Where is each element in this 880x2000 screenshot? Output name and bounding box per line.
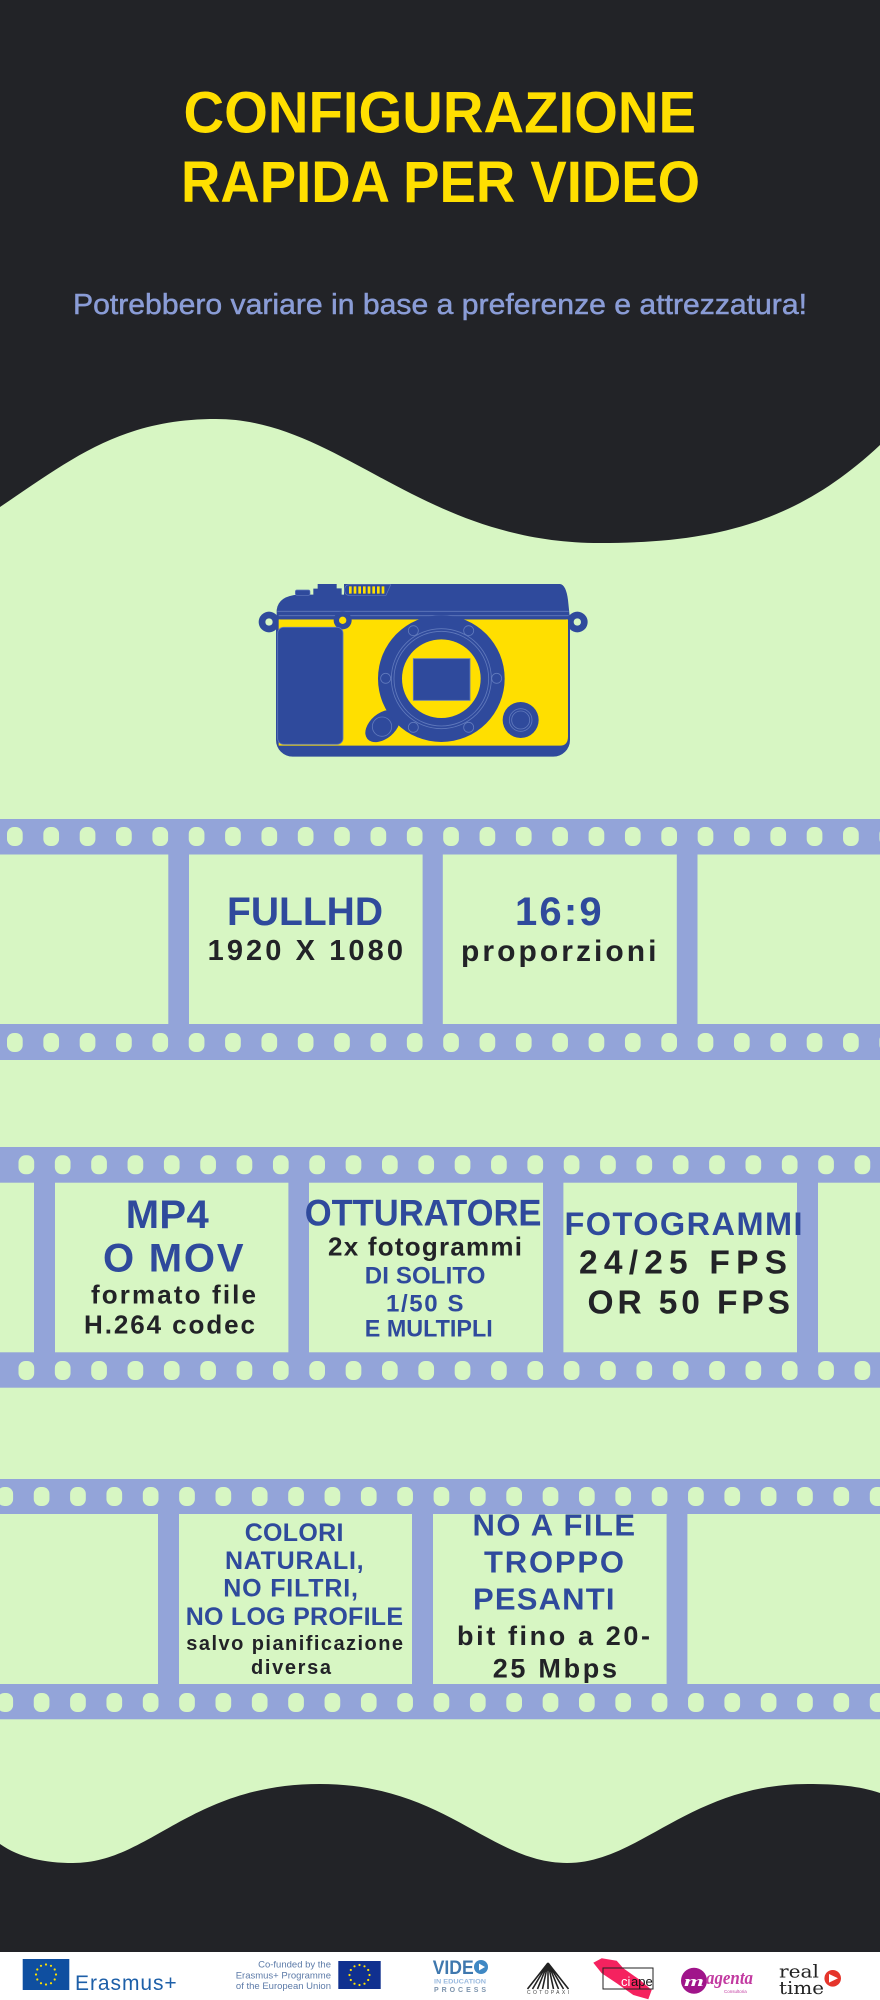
shutter button	[295, 590, 310, 595]
frame text: shutter: OTTURATORE	[305, 1192, 542, 1233]
logo: Magenta: agenta	[706, 1968, 753, 1989]
logo: Ciape: ape	[631, 1974, 653, 1989]
frame text: colours: NATURALI,	[225, 1547, 364, 1575]
footer logo strip	[0, 1952, 880, 2000]
logo: Video in Education Process: IN EDUCATION	[434, 1978, 486, 1986]
frame text: file format: formato file	[91, 1279, 256, 1309]
frame text: frame rate	[564, 1206, 802, 1321]
frame text: shutter: E MULTIPLI	[365, 1316, 493, 1343]
logo: Real Time: real	[779, 1962, 819, 1983]
film band: top	[0, 1147, 880, 1183]
frame text: frame rate: 24/25 FPS	[579, 1244, 787, 1281]
top plate	[277, 584, 570, 619]
logo: Magenta: m	[684, 1974, 704, 1990]
frame text: file format: O MOV	[103, 1236, 244, 1280]
logo: co-funded by the EU: Co-funded by the	[258, 1960, 331, 1971]
film strip 3	[0, 1479, 880, 1719]
logo: Erasmus+	[23, 1959, 177, 1995]
film band: top	[0, 819, 880, 854]
frame text: resolution	[208, 890, 403, 967]
lens release dial	[503, 702, 539, 738]
frame text: bitrate: PESANTI	[473, 1581, 614, 1616]
frame text: file format: H.264 codec	[84, 1310, 255, 1340]
title: CONFIGURAZIONE	[184, 80, 696, 146]
subtitle: Potrebbero variare in base a preferenze e attrezzatura!	[73, 289, 807, 321]
perforations bottom	[7, 1033, 880, 1052]
frame text: bitrate: bit fino a 20-	[457, 1621, 650, 1651]
frame text: colours: diversa	[251, 1657, 332, 1679]
logo: Ciape	[593, 1958, 653, 1999]
film band: bottom	[0, 1352, 880, 1388]
frame text: frame rate: OR 50 FPS	[588, 1284, 790, 1321]
perforations top	[7, 827, 880, 846]
frame text: frame rate: FOTOGRAMMI	[564, 1206, 802, 1242]
strap ring	[334, 611, 352, 629]
perforations top	[0, 1487, 880, 1506]
frame text: file format	[84, 1193, 256, 1340]
title: RAPIDA PER VIDEO	[181, 150, 700, 215]
logo: Cotopaxi	[527, 1963, 569, 1996]
frame text: resolution: 1920 X 1080	[208, 935, 403, 967]
logo: Magenta	[681, 1968, 753, 1994]
film strip 2	[0, 1147, 880, 1388]
frame text: shutter: 1/50 S	[386, 1290, 464, 1317]
frame text: bitrate	[457, 1508, 650, 1683]
camera body	[276, 613, 570, 757]
frame dividers	[168, 854, 698, 1025]
bottom dark wave panel	[0, 1784, 880, 1952]
frame text: aspect ratio	[461, 890, 656, 968]
logo: Video in Education Process: PROCESS	[434, 1987, 486, 1994]
top dark wave panel	[0, 0, 880, 543]
frame text: colours: COLORI	[245, 1519, 343, 1547]
perforations bottom	[18, 1361, 880, 1380]
logo: Real Time	[779, 1962, 841, 1999]
frame dividers	[158, 1514, 687, 1685]
frame text: bitrate: 25 Mbps	[493, 1653, 617, 1683]
frame text: aspect ratio: 16:9	[515, 890, 602, 934]
perforations top	[18, 1155, 880, 1174]
logo: Video in Education Process: VIDE	[433, 1958, 474, 1979]
icon: camera	[259, 584, 588, 757]
logo: co-funded by the EU: of the European Union	[236, 1981, 331, 1992]
title	[181, 80, 700, 215]
film band: bottom	[0, 1684, 880, 1719]
sensor	[413, 659, 470, 700]
frame dividers	[34, 1182, 818, 1353]
logo: Ciape: ci	[621, 1974, 630, 1989]
logo: co-funded by the EU	[236, 1960, 381, 1992]
frame text: bitrate: NO A FILE	[472, 1508, 635, 1543]
frame text: colours: NO LOG PROFILE	[186, 1603, 403, 1631]
film strip 1	[0, 819, 880, 1060]
yellow leather panel	[279, 619, 568, 746]
frame text: colours	[186, 1519, 403, 1679]
release button	[359, 703, 406, 749]
film band: bottom	[0, 1024, 880, 1060]
frame text: shutter: 2x fotogrammi	[328, 1232, 522, 1262]
frame text: shutter: DI SOLITO	[365, 1263, 485, 1290]
frame text: shutter	[305, 1192, 542, 1343]
perforations bottom	[0, 1693, 880, 1712]
top dial knurl	[345, 585, 391, 595]
frame text: colours: salvo pianificazione	[186, 1633, 403, 1655]
film band: top	[0, 1479, 880, 1514]
frame text: aspect ratio: proporzioni	[461, 935, 656, 968]
lens mount	[378, 615, 505, 742]
frame text: file format: MP4	[126, 1193, 209, 1237]
frame text: colours: NO FILTRI,	[223, 1575, 358, 1603]
grip	[278, 627, 343, 744]
logo: Magenta: Consultoria	[724, 1989, 747, 1994]
frame text: bitrate: TROPPO	[484, 1545, 624, 1580]
logo: Erasmus+: Erasmus+	[75, 1972, 177, 1995]
logo: Real Time: time	[779, 1978, 824, 1999]
logo: co-funded by the EU: Erasmus+ Programme	[236, 1970, 331, 1981]
logo: Cotopaxi: COTOPAXI	[527, 1990, 569, 1996]
logo: Video in Education Process	[433, 1958, 488, 1994]
camera strap lugs	[259, 612, 588, 632]
frame text: resolution: FULLHD	[227, 890, 383, 934]
